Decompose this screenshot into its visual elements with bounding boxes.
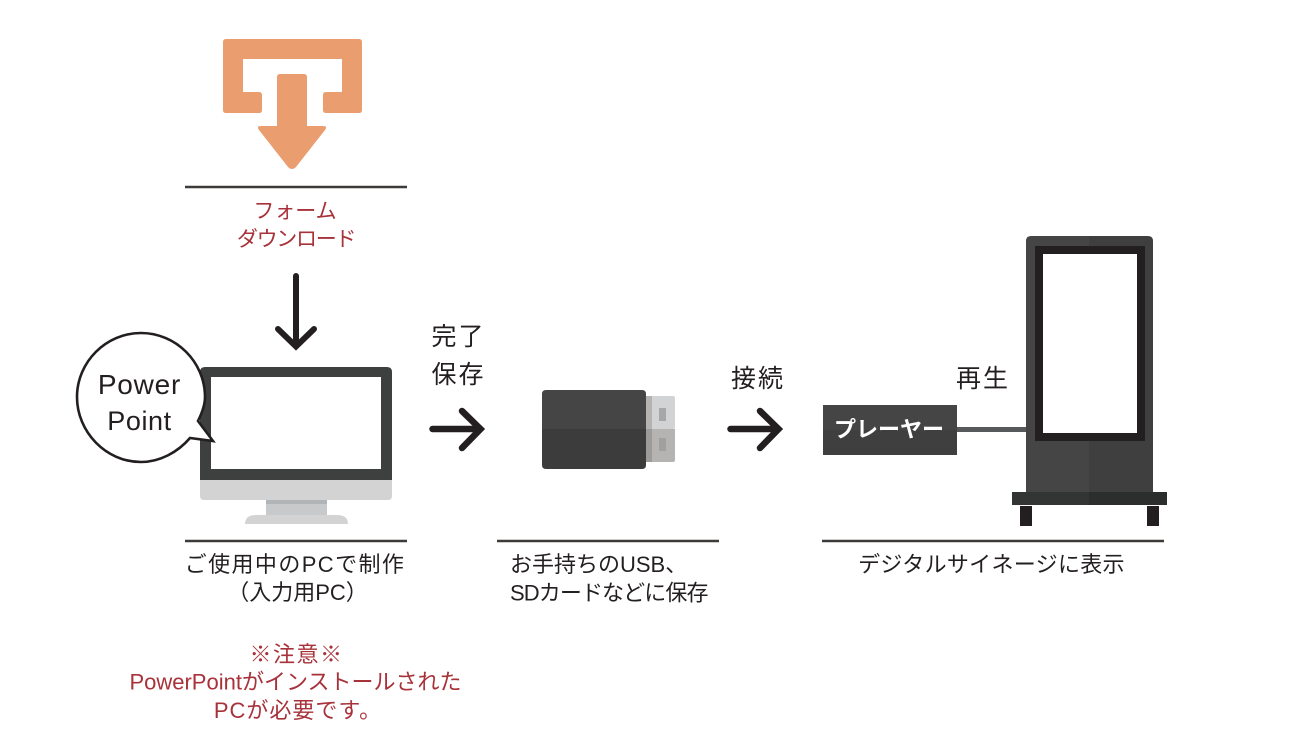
caption: PC: （入力用PC） xyxy=(227,580,368,605)
icon: digital signage stand xyxy=(1012,236,1167,526)
arrow: down to PC xyxy=(278,276,314,346)
caption: PC: ご使用中のPCで制作 xyxy=(185,552,405,577)
cable xyxy=(957,427,1027,432)
caution note: PowerPointがインストールされた xyxy=(129,670,462,694)
icon: USB drive xyxy=(542,390,675,469)
label: complete and save: 保存 xyxy=(431,361,486,389)
heading: form download: フォーム xyxy=(253,200,337,223)
caption: signage: デジタルサイネージに表示 xyxy=(858,552,1125,577)
callout: PowerPoint bubble: Power xyxy=(98,369,181,400)
icon: monitor xyxy=(200,367,392,524)
caution note: PCが必要です。 xyxy=(214,698,382,723)
callout: PowerPoint bubble: Point xyxy=(107,406,172,436)
label: connect: 接続 xyxy=(731,365,785,393)
callout: PowerPoint bubble xyxy=(77,333,213,462)
player box xyxy=(823,405,957,455)
label: complete and save: 完了 xyxy=(431,323,486,351)
caption: USB xyxy=(510,552,708,606)
label: complete and save xyxy=(431,323,486,389)
caution note xyxy=(129,642,462,723)
caption: USB: お手持ちのUSB、 xyxy=(510,552,687,577)
player box: プレーヤー xyxy=(834,417,944,442)
heading: form download xyxy=(237,200,355,251)
arrow: to player xyxy=(730,411,778,448)
caution note: ※注意※ xyxy=(249,642,344,667)
heading: form download: ダウンロード xyxy=(237,228,355,251)
arrow: to USB xyxy=(432,411,480,448)
caption: PC xyxy=(185,552,405,605)
icon: form download xyxy=(223,39,362,169)
label: play: 再生 xyxy=(956,365,1010,393)
caption: USB: SDカードなどに保存 xyxy=(510,580,708,606)
